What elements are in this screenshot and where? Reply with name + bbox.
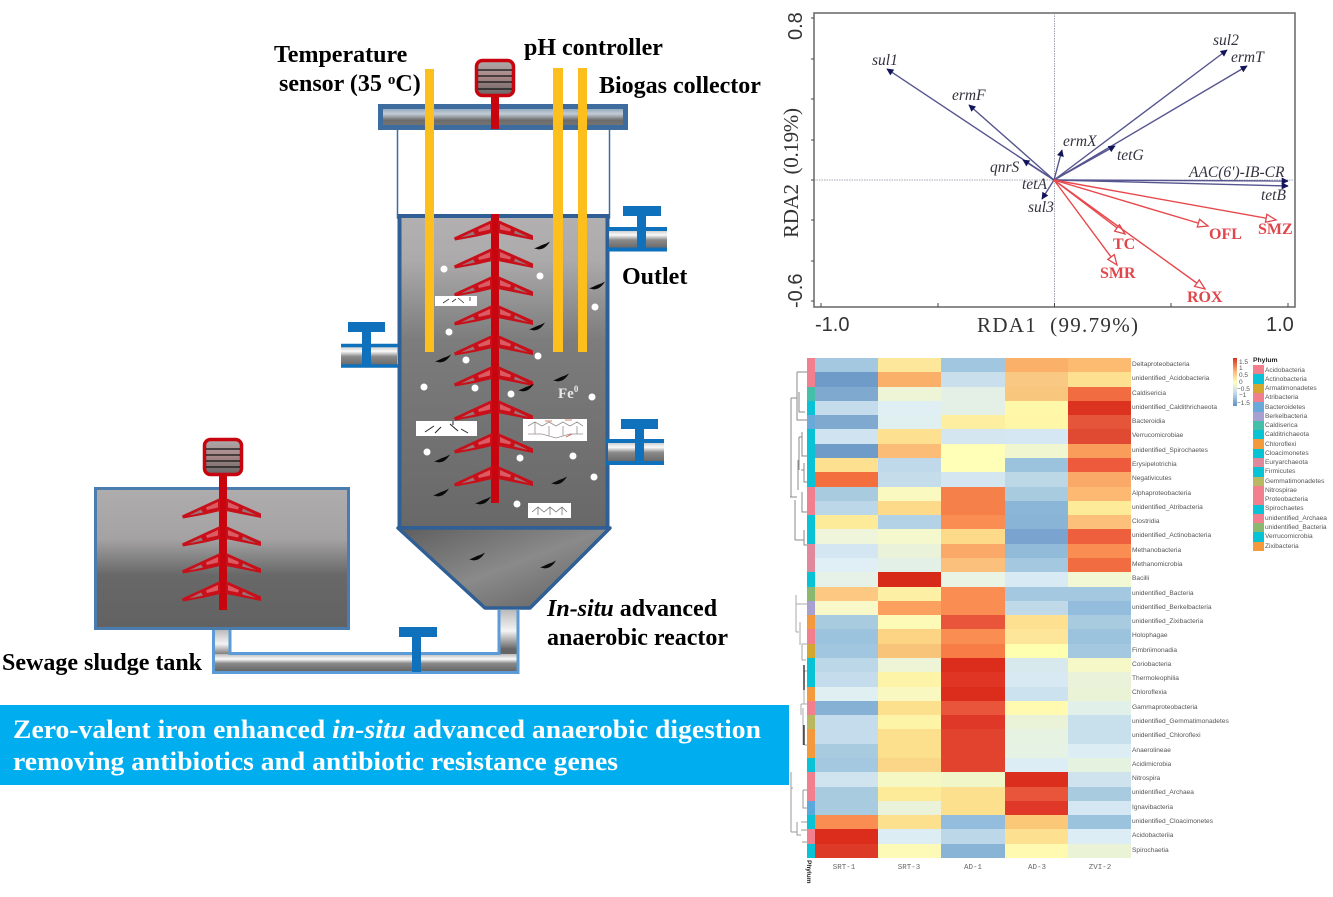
heatmap row labels: unidentified_Acidobacteria: [1132, 375, 1209, 382]
heatmap column labels: ZVI-2: [1089, 864, 1111, 872]
title text line 2: removing antibiotics and antibiotic resistance genes: [13, 746, 618, 776]
Fe0 label: Fe: [558, 386, 574, 402]
antibiotic labels: ROX: [1187, 289, 1223, 306]
y axis labels: 0.8: [785, 12, 807, 40]
title banner: [0, 705, 789, 785]
heatmap row labels: Alphaproteobacteria: [1132, 490, 1191, 497]
gene labels: [872, 32, 1286, 216]
phylum strip label: Phylum: [805, 860, 812, 884]
antibiotic vectors: [1054, 180, 1276, 289]
phylum legend labels: Actinobacteria: [1265, 376, 1307, 383]
phylum legend labels: Firmicutes: [1265, 468, 1295, 475]
iron particles: [420, 266, 598, 508]
phylum legend labels: Chloroflexi: [1265, 441, 1296, 448]
temperature sensor tube: [425, 69, 434, 352]
label: temperature sensor: Temperature: [274, 42, 407, 68]
heatmap row labels: unidentified_Atribacteria: [1132, 504, 1203, 511]
heatmap row labels: Thermoleophilia: [1132, 675, 1179, 682]
antibiotic labels: SMZ: [1258, 221, 1293, 238]
stirrer: [454, 60, 533, 503]
phylum annotation strip: [807, 358, 815, 858]
heatmap row labels: unidentified_Spirochaetes: [1132, 447, 1208, 454]
connecting pipe with valve: [214, 610, 518, 672]
label: temperature sensor: sensor (35: [279, 71, 388, 97]
label: temperature sensor: C): [395, 71, 421, 97]
heatmap row labels: unidentified_Chloroflexi: [1132, 732, 1201, 739]
gene labels: tetA: [1022, 176, 1047, 193]
gene labels: ermX: [1063, 133, 1097, 150]
label: pH controller: pH controller: [524, 35, 663, 61]
color scale legend: 0.5: [1239, 372, 1248, 379]
pH controller tube: [553, 68, 563, 352]
gene labels: AAC(6')-IB-CR: [1188, 164, 1285, 181]
phylum legend labels: Atribacteria: [1265, 394, 1298, 401]
tank stirrer: [182, 440, 261, 610]
phylum legend labels: Armatimonadetes: [1265, 385, 1317, 392]
gene labels: ermT: [1231, 49, 1265, 66]
phylum legend title: Phylum: [1253, 357, 1278, 364]
heatmap row labels: unidentified_Zixibacteria: [1132, 618, 1203, 625]
valve: right side: [606, 419, 664, 463]
phylum legend labels: Spirochaetes: [1265, 505, 1304, 512]
antibiotic labels: SMR: [1100, 265, 1136, 282]
phylum legend labels: unidentified_Bacteria: [1265, 524, 1327, 531]
antibiotic labels: OFL: [1209, 226, 1242, 243]
heatmap row labels: Anaerolineae: [1132, 747, 1171, 754]
valve: outlet: [608, 206, 667, 251]
heatmap row labels: unidentified_Cloacimonetes: [1132, 818, 1213, 825]
heatmap column labels: SRT-3: [898, 864, 921, 872]
gene labels: tetB: [1261, 187, 1286, 204]
antibiotic labels: [1100, 221, 1293, 306]
label: biogas collector: Biogas collector: [599, 73, 761, 99]
phylum legend labels: Calditrichaeota: [1265, 431, 1309, 438]
heatmap row labels: Acidobacteriia: [1132, 832, 1173, 839]
color scale legend: −1: [1239, 392, 1247, 399]
heatmap row labels: Gammaproteobacteria: [1132, 704, 1198, 711]
heatmap row labels: unidentified_Bacteria: [1132, 590, 1194, 596]
heatmap row labels: Negativicutes: [1132, 475, 1172, 482]
heatmap row labels: unidentified_Actinobacteria: [1132, 532, 1211, 539]
heatmap cells: [815, 358, 1131, 858]
zero-valent iron flakes: [416, 296, 587, 518]
heatmap row labels: unidentified_Caldithrichaeota: [1132, 404, 1217, 411]
label: outlet: Outlet: [622, 264, 687, 290]
heatmap row labels: unidentified_Berkelbacteria: [1132, 604, 1212, 611]
heatmap row labels: Deltaproteobacteria: [1132, 361, 1190, 368]
phylum legend swatches: [1253, 365, 1264, 551]
gene labels: sul3: [1028, 199, 1054, 216]
label: sewage sludge tank: Sewage sludge tank: [2, 650, 203, 676]
valve: left side: [341, 322, 398, 367]
heatmap row labels: Clostridia: [1132, 518, 1159, 525]
phylum legend labels: [1265, 366, 1327, 550]
in-situ reactor: [380, 60, 626, 608]
heatmap row labels: unidentified_Gemmatimonadetes: [1132, 718, 1229, 725]
phylum legend labels: Gemmatimonadetes: [1265, 478, 1324, 485]
color scale legend: 1.5: [1239, 359, 1248, 366]
heatmap row labels: unidentified_Archaea: [1132, 789, 1194, 796]
reactor liquid body: [400, 216, 608, 528]
gene labels: sul1: [872, 52, 898, 69]
heatmap row labels: Coriobacteria: [1132, 661, 1171, 668]
phylum legend labels: Zixibacteria: [1265, 543, 1299, 550]
heatmap row labels: Chloroflexia: [1132, 689, 1167, 696]
label: temperature sensor: o: [388, 72, 395, 88]
x axis labels: [815, 313, 1294, 337]
antibiotic labels: TC: [1113, 236, 1135, 253]
phylum legend labels: Nitrospirae: [1265, 487, 1297, 494]
color scale legend: 0: [1239, 379, 1243, 386]
y axis labels: RDA2 (0.19%): [779, 108, 803, 238]
Fe0 label: 0: [574, 384, 579, 394]
label: in-situ advanced anaerobic reactor: anaerobic reactor: [547, 625, 728, 651]
color scale legend: −1.5: [1237, 400, 1250, 407]
y axis labels: [779, 12, 807, 308]
heatmap row labels: Bacteroidia: [1132, 418, 1165, 425]
gene labels: sul2: [1213, 32, 1239, 49]
plot frame and ticks: [811, 13, 1295, 307]
heatmap row labels: Spirochaetia: [1132, 847, 1169, 854]
phylum legend labels: Proteobacteria: [1265, 496, 1308, 503]
heatmap row labels: Caldisericia: [1132, 390, 1166, 397]
heatmap row labels: Bacilli: [1132, 575, 1149, 582]
reactor headspace: [398, 128, 610, 218]
y axis labels: -0.6: [785, 274, 807, 308]
gene labels: tetG: [1117, 147, 1144, 164]
heatmap row labels: Holophagae: [1132, 632, 1168, 639]
phylum legend labels: Euryarchaeota: [1265, 459, 1308, 466]
gene vectors: [887, 50, 1288, 199]
gene labels: ermF: [952, 87, 986, 104]
heatmap column labels: AD-1: [964, 864, 982, 872]
bacteria: [433, 242, 605, 568]
phylum legend labels: Acidobacteria: [1265, 366, 1305, 374]
title text: Zero-valent iron enhanced in-situ advanced anaerobic digestion: [13, 714, 761, 744]
color scale legend: 1: [1239, 365, 1243, 372]
phylum legend labels: unidentified_Archaea: [1265, 515, 1327, 522]
phylum legend labels: Cloacimonetes: [1265, 450, 1309, 457]
x axis labels: RDA1 (99.79%): [977, 313, 1138, 337]
reactor lid: [380, 106, 626, 128]
phylum legend labels: Berkelbacteria: [1265, 413, 1307, 420]
biogas collector tube: [578, 68, 587, 352]
heatmap row labels: Methanomicrobia: [1132, 561, 1183, 568]
heatmap row labels: Fimbriimonadia: [1132, 647, 1177, 654]
heatmap column labels: SRT-1: [833, 864, 856, 872]
RDA biplot: [779, 12, 1296, 337]
heatmap row labels: Methanobacteria: [1132, 547, 1181, 554]
reactor cone: [398, 528, 610, 608]
heatmap row labels: Ignavibacteria: [1132, 804, 1173, 811]
x axis labels: 1.0: [1266, 314, 1294, 336]
phylum legend labels: Verrucomicrobia: [1265, 533, 1313, 540]
color scale legend: −0.5: [1237, 386, 1250, 393]
reactor process diagram: [2, 35, 761, 676]
heatmap column labels: AD-3: [1028, 864, 1046, 872]
phylum legend labels: Bacteroidetes: [1265, 404, 1305, 411]
heatmap row labels: [1132, 361, 1229, 854]
label: in-situ advanced anaerobic reactor: In-situ advanced: [547, 596, 717, 622]
gene labels: qnrS: [990, 159, 1020, 176]
sewage sludge tank: [96, 440, 348, 628]
heatmap row labels: Nitrospira: [1132, 775, 1160, 782]
phylum legend labels: Caldiserica: [1265, 422, 1298, 429]
heatmap row labels: Verrucomicrobiae: [1132, 432, 1183, 439]
x axis labels: -1.0: [815, 314, 849, 336]
heatmap row labels: Acidimicrobia: [1132, 761, 1171, 768]
heatmap row labels: Erysipelotrichia: [1132, 461, 1177, 468]
